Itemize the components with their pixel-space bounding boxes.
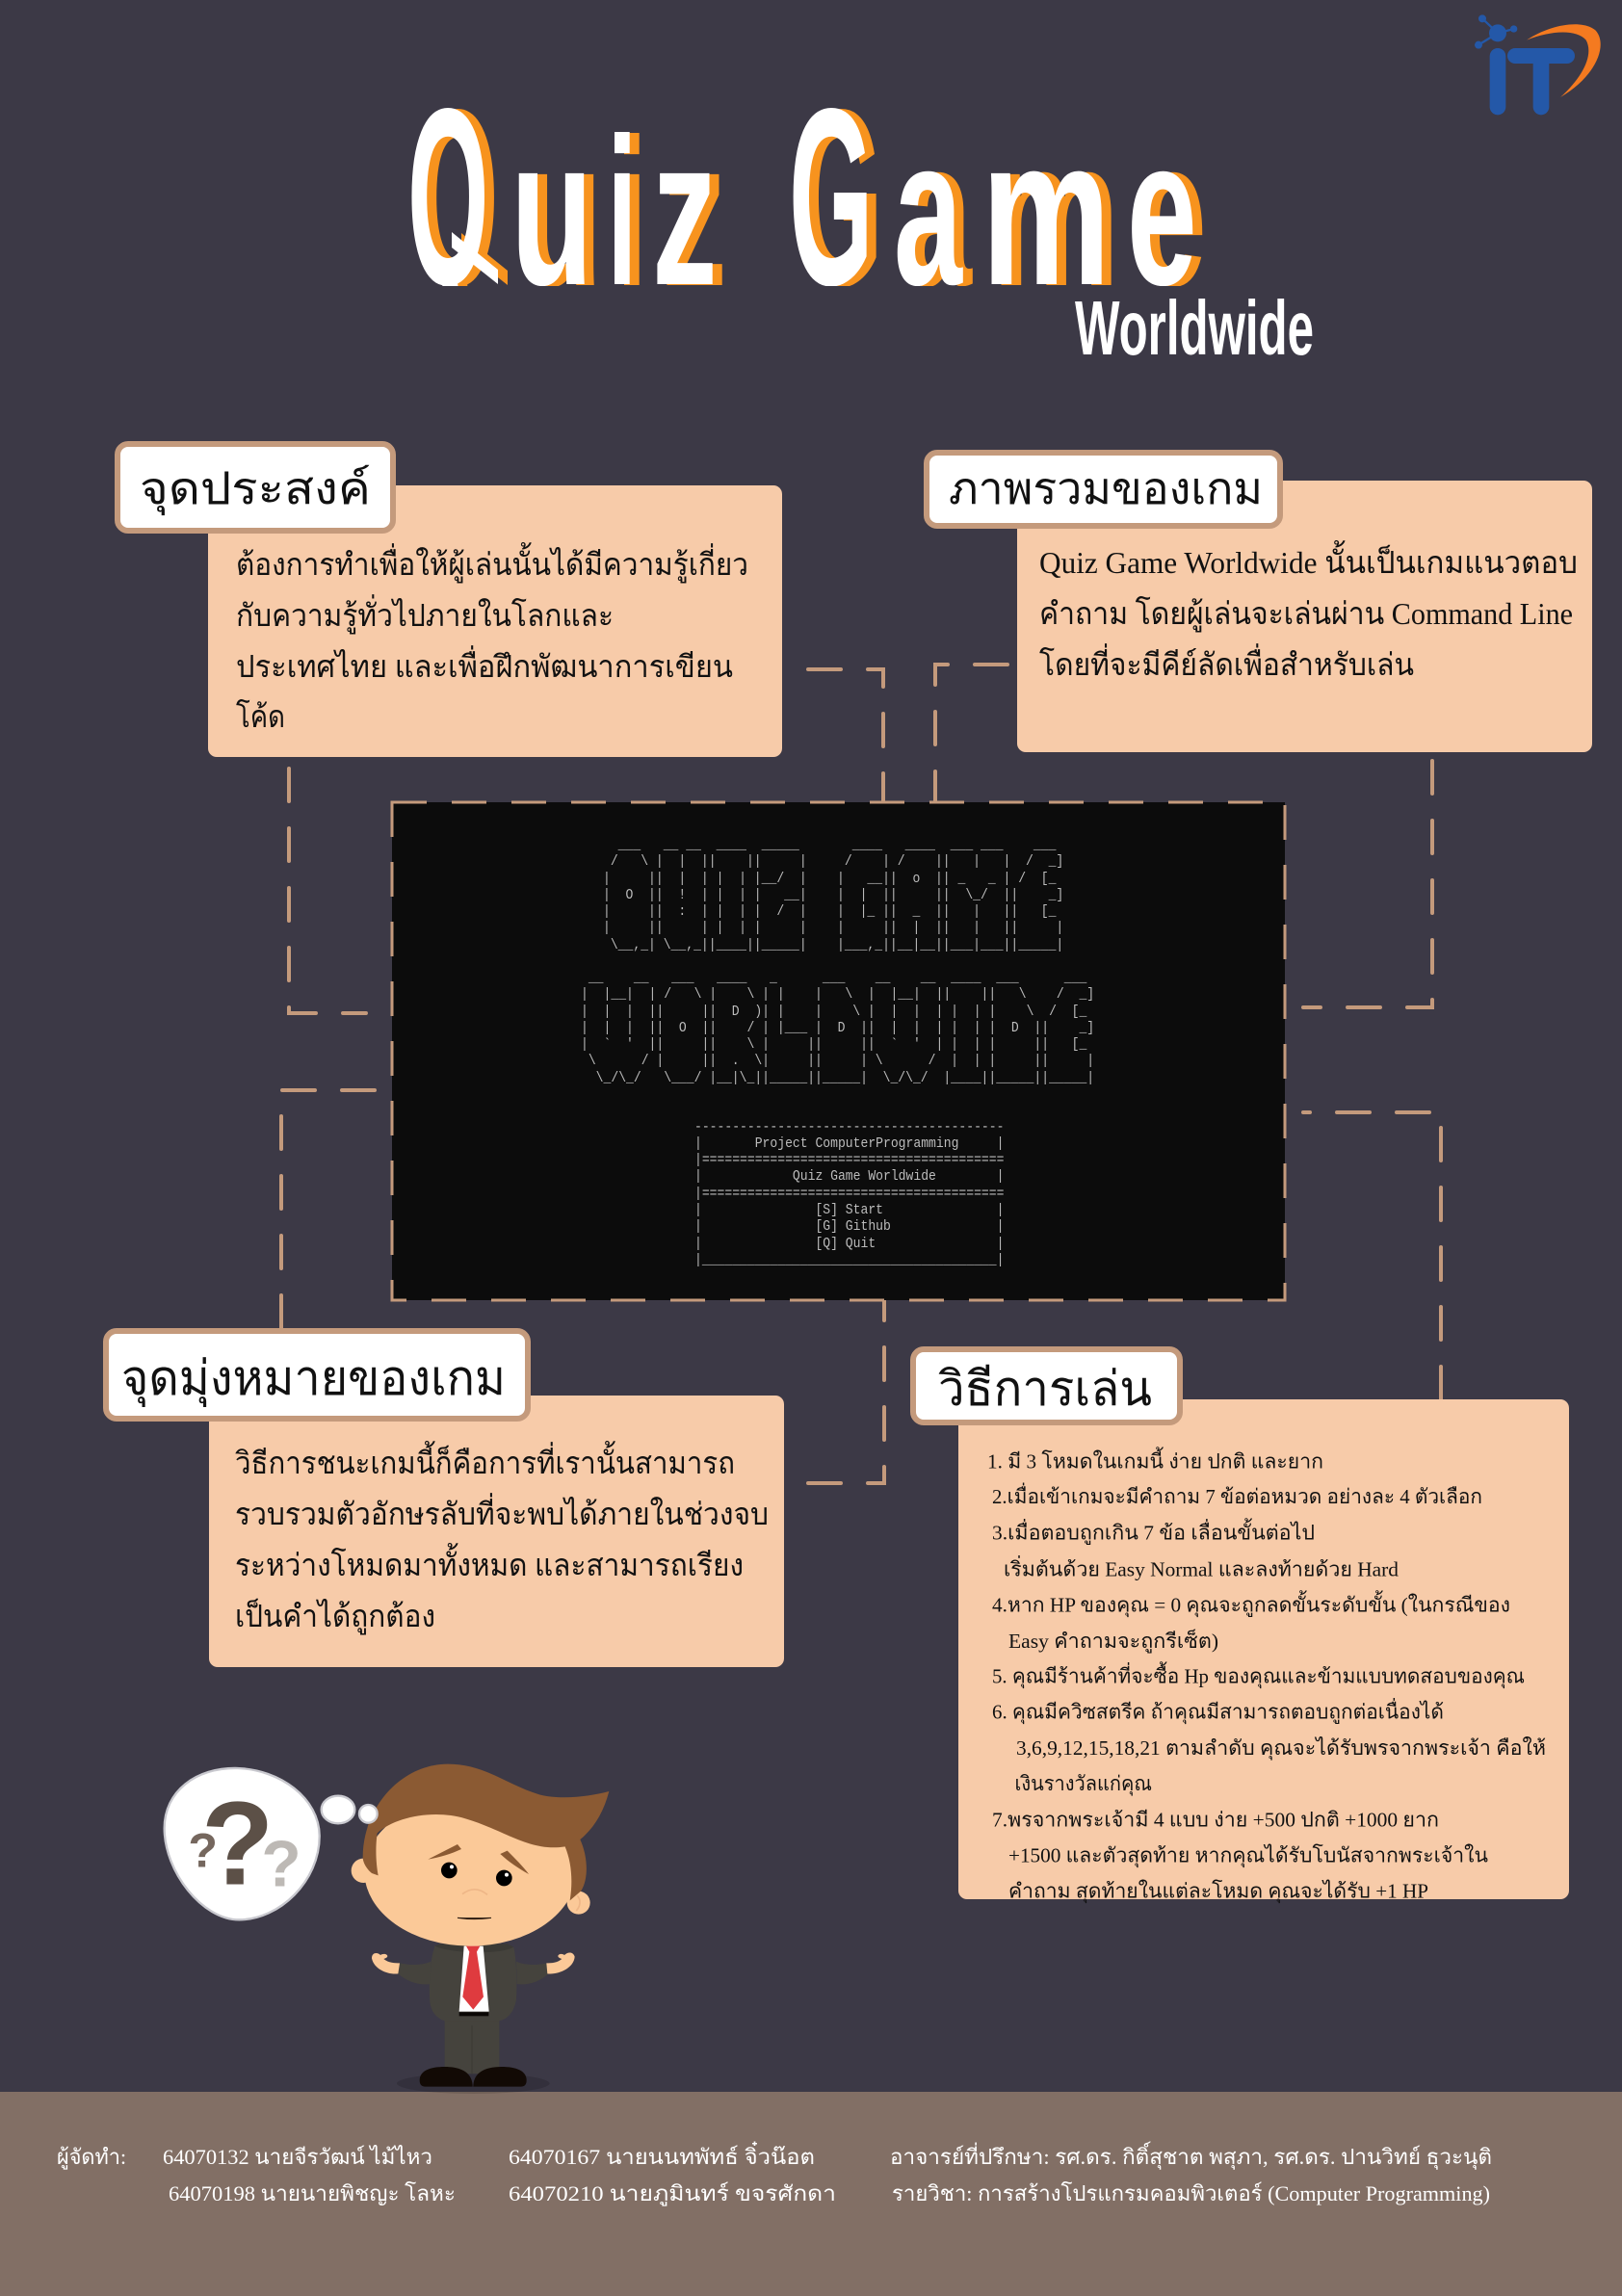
body text: rules: 2.เมื่อเข้าเกมจะมีคำถาม 7 ข้อต่อหมวด อย่างละ 4 ตัวเลือก [992, 1482, 1482, 1508]
body text: overview [1039, 540, 1578, 682]
body text: objective: ต้องการทำเพื่อให้ผู้เล่นนั้นได้มีความรู้เกี่ยว [236, 542, 748, 584]
title: Quiz Game Worldwide: i [607, 95, 638, 329]
footer credits text: 64070167 นายนนทพัทธ์ จิ๋วน๊อต [509, 2141, 815, 2169]
title: Quiz Game Worldwide: G [789, 56, 874, 338]
title: Quiz Game Worldwide: z [662, 96, 727, 330]
title: Quiz Game Worldwide: Q [407, 56, 489, 338]
dashed connectors between panels and the screenshot [281, 665, 1441, 1483]
panel: game screenshot terminal [392, 802, 1285, 1300]
body text: rules [987, 1447, 1546, 1903]
body text: goal: เป็นคำได้ถูกต้อง [235, 1598, 435, 1635]
body text: rules: 6. คุณมีควิซสตรีค ถ้าคุณมีสามารถตอบถูกต่อเนื่องได้ [992, 1698, 1444, 1725]
title: Quiz Game Worldwide: Q [417, 57, 499, 339]
head [352, 1764, 609, 1946]
title: Quiz Game Worldwide: e [1127, 95, 1197, 329]
body text: rules: Easy คำถามจะถูกรีเซ็ต) [1008, 1628, 1218, 1654]
title: Quiz Game Worldwide: i [616, 96, 647, 330]
body text: goal [235, 1441, 769, 1635]
footer credits text: อาจารย์ที่ปรึกษา: รศ.ดร. กิติ์สุชาต พสุภา, รศ.ดร. ปานวิทย์ ธุวะนุติ [890, 2142, 1492, 2170]
title: Quiz Game Worldwide: z [652, 95, 718, 329]
footer credits text: 64070132 นายจีรวัฒน์ ไม้ไหว [163, 2145, 432, 2169]
logo: IT [1475, 14, 1601, 115]
body text: objective: กับความรู้ทั่วไปภายในโลกและ [236, 594, 614, 635]
body text: rules: 7.พรจากพระเจ้ามี 4 แบบ ง่าย +500 ปกติ +1000 ยาก [992, 1808, 1439, 1831]
panel: objective [118, 444, 782, 757]
footer band [0, 2092, 1622, 2296]
body text: goal: รวบรวมตัวอักษรลับที่จะพบได้ภายในช่วงจบ [235, 1493, 769, 1531]
title: Quiz Game Worldwide: Worldwide [1075, 285, 1314, 371]
thought bubble: ? [188, 1823, 218, 1877]
title: Quiz Game Worldwide: a [894, 95, 963, 329]
body text: overview: คำถาม โดยผู้เล่นจะเล่นผ่าน Command Line [1039, 596, 1573, 633]
thought bubble: ? [201, 1778, 274, 1911]
footer credits text: รายวิชา: การสร้างโปรแกรมคอมพิวเตอร์ (Computer Programming) [892, 2181, 1490, 2205]
heading tag: objective [118, 444, 393, 531]
heading tag: goal [106, 1331, 528, 1419]
body text: objective [236, 542, 748, 734]
body text: rules: 3,6,9,12,15,18,21 ตามลำดับ คุณจะได้รับพรจากพระเจ้า คือให้ [1016, 1736, 1546, 1761]
heading tag: overview [927, 453, 1280, 526]
title: Quiz Game Worldwide: e [1137, 96, 1207, 330]
footer credits text: 64070198 นายนายพิชญะ โลหะ [169, 2181, 456, 2205]
footer credits text: ผู้จัดทำ: [57, 2145, 126, 2170]
panel: game goal [106, 1331, 784, 1667]
ascii art: WORLDWIDE: __ __ ___ ____ _ ___ __ __ ____ ___ ___ | |__| | / \ | \ | | | \ | |__| || || \ / _] | | | || || D )| | | \ | | | | | | | \ / [_ | | | || O || / | |___ | D || | | | | | | D || _] | ` ' || || \ | || || ` ' | | | | || [_ \ / | || . \| || | \ / | | | || | \_/\_/ \___/ |__|\_||_____||_____| \_/\_/ |____||_____||_____| [581, 970, 1094, 1086]
body text: rules: 5. คุณมีร้านค้าที่จะซื้อ Hp ของคุณและข้ามแบบทดสอบของคุณ [992, 1662, 1525, 1689]
title: Quiz Game Worldwide: a [903, 96, 973, 330]
body text: overview: โดยที่จะมีคีย์ลัดเพื่อสำหรับเล่น [1039, 643, 1414, 682]
title: Quiz Game Worldwide [411, 108, 1312, 355]
title: Quiz Game Worldwide: u [520, 96, 603, 330]
body text: rules: 4.หาก HP ของคุณ = 0 คุณจะถูกลดขั้นระดับขั้น (ในกรณีของ [992, 1591, 1510, 1618]
body text: rules: คำถาม สุดท้ายในแต่ละโหมด คุณจะได้รับ +1 HP [1008, 1879, 1428, 1903]
title: Quiz Game Worldwide: m [991, 96, 1120, 330]
illustration: confused businessman with thought bubble [165, 1764, 609, 2094]
title: Quiz Game Worldwide: u [510, 95, 593, 329]
body text: overview: Quiz Game Worldwide นั้นเป็นเกมแนวตอบ [1039, 540, 1578, 580]
thought bubble [165, 1768, 378, 1919]
ascii art: QUIZ GAME: ___ __ __ ____ _____ ____ ____ ___ ___ ___ / \ | | || || | / | / || | | / _] | || | | | | |__/ | | __|| o || _ _ | / [_ | O || ! | | | | __| | | || || \_/ || _] | || : | | | | / | | |_ || _ || | || [_ | || | | | | | | || | || | || | \__,_| \__,_||____||_____| |___,_||__|__||___|___||_____| [603, 837, 1063, 953]
body text: objective: ประเทศไทย และเพื่อฝึกพัฒนาการเขียน [236, 645, 733, 684]
panel: game overview [927, 453, 1592, 752]
title: Quiz Game Worldwide: G [798, 57, 883, 339]
body text: rules: เริ่มต้นด้วย Easy Normal และลงท้ายด้วย Hard [1004, 1554, 1399, 1580]
body text: rules: เงินรางวัลแก่คุณ [1015, 1772, 1152, 1796]
thought bubble: ? [261, 1828, 301, 1900]
title: Quiz Game Worldwide: m [981, 95, 1111, 329]
heading tag: goal: จุดมุ่งหมายของเกม [121, 1351, 506, 1407]
body text: rules: 1. มี 3 โหมดในเกมนี้ ง่าย ปกติ และยาก [987, 1447, 1323, 1473]
body text: goal: วิธีการชนะเกมนี้ก็คือการที่เรานั้นสามารถ [235, 1441, 735, 1480]
footer credits text: 64070210 นายภูมินทร์ ขจรศักดา [509, 2181, 836, 2206]
heading tag: how to play [913, 1349, 1180, 1422]
heading tag: overview: ภาพรวมของเกม [949, 464, 1263, 513]
body text: objective: โค้ด [236, 699, 285, 734]
body text: goal: ระหว่างโหมดมาทั้งหมด และสามารถเรียง [235, 1543, 744, 1582]
body text: rules: +1500 และตัวสุดท้าย หากคุณได้รับโบนัสจากพระเจ้าใน [1008, 1843, 1488, 1868]
menu box: ----------------------------------------- | Project ComputerProgramming | |======================================== | Quiz Game Worldwide | |======================================== | [S] Start | | [G] Github | | [Q] Quit | |_______________________________________| [694, 1119, 1004, 1268]
ground shadow [397, 2074, 550, 2094]
heading tag: objective: จุดประสงค์ [140, 464, 371, 516]
panel: how to play [913, 1349, 1569, 1903]
body text: rules: 3.เมื่อตอบถูกเกิน 7 ข้อ เลื่อนขั้นต่อไป [992, 1518, 1315, 1545]
heading tag: how to play: วิธีการเล่น [938, 1362, 1152, 1416]
footer credits text [57, 2141, 1492, 2206]
body and suit [372, 1944, 575, 2087]
